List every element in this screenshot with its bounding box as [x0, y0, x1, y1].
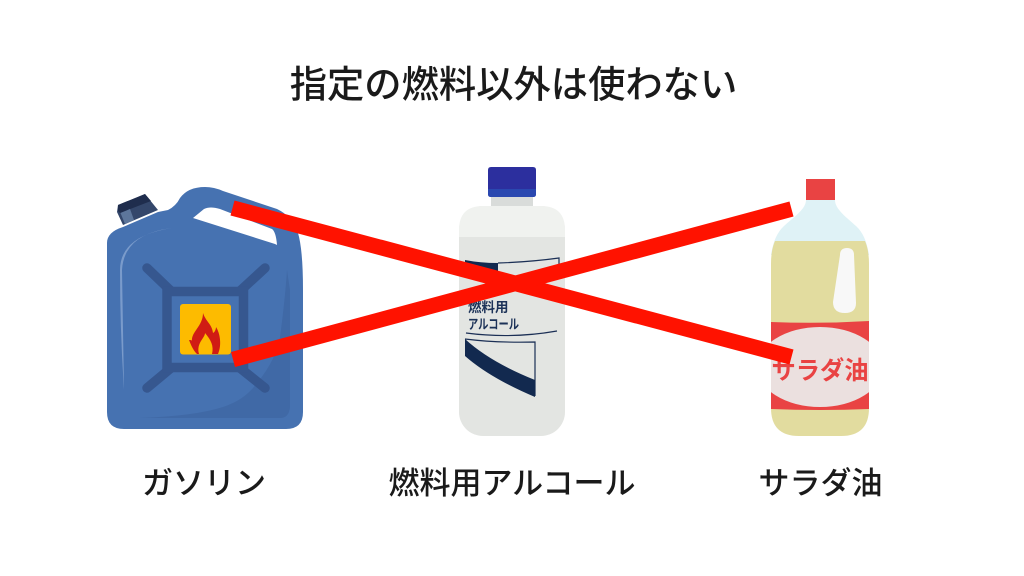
oil bottle cap: [806, 179, 835, 200]
oil bottle label text: サラダ油: [772, 356, 868, 385]
icon: gasoline jerry can: [107, 187, 303, 429]
jerry can handle hole: [193, 208, 277, 245]
label: gasoline: ガソリン: [142, 466, 266, 501]
oil bottle body: [771, 241, 869, 436]
label: salad oil: サラダ油: [758, 466, 882, 501]
icon: flame: [189, 313, 220, 354]
bottle upper label: [465, 258, 559, 276]
oil bottle highlight: [833, 248, 856, 313]
jerry can stamped frame: [147, 268, 265, 388]
bottle label text line two: アルコール: [468, 317, 519, 332]
flammable label: [180, 304, 231, 354]
title: 指定の燃料以外は使わない: [290, 64, 737, 106]
jerry can body: [107, 187, 303, 429]
red cross mark: [232, 208, 792, 360]
icon: fuel alcohol bottle: [459, 167, 565, 436]
icon: salad oil bottle: [771, 179, 869, 436]
bottle label text: 燃料用: [468, 299, 508, 315]
oil bottle oval label: [771, 327, 869, 407]
jerry can highlight: [120, 228, 172, 390]
bottle neck: [491, 194, 533, 208]
oil bottle red label: [771, 321, 869, 410]
bottle shoulder: [459, 206, 565, 237]
jerry can cap: [117, 194, 158, 225]
oil bottle upper: [771, 198, 869, 255]
bottle divider: [466, 331, 557, 336]
bottle cap: [488, 167, 536, 197]
label: fuel alcohol: 燃料用アルコール: [388, 466, 636, 501]
bottle body: [459, 206, 565, 436]
jerry can shading: [140, 270, 290, 418]
bottle lower label: [465, 339, 535, 397]
infographic canvas: [107, 65, 880, 497]
